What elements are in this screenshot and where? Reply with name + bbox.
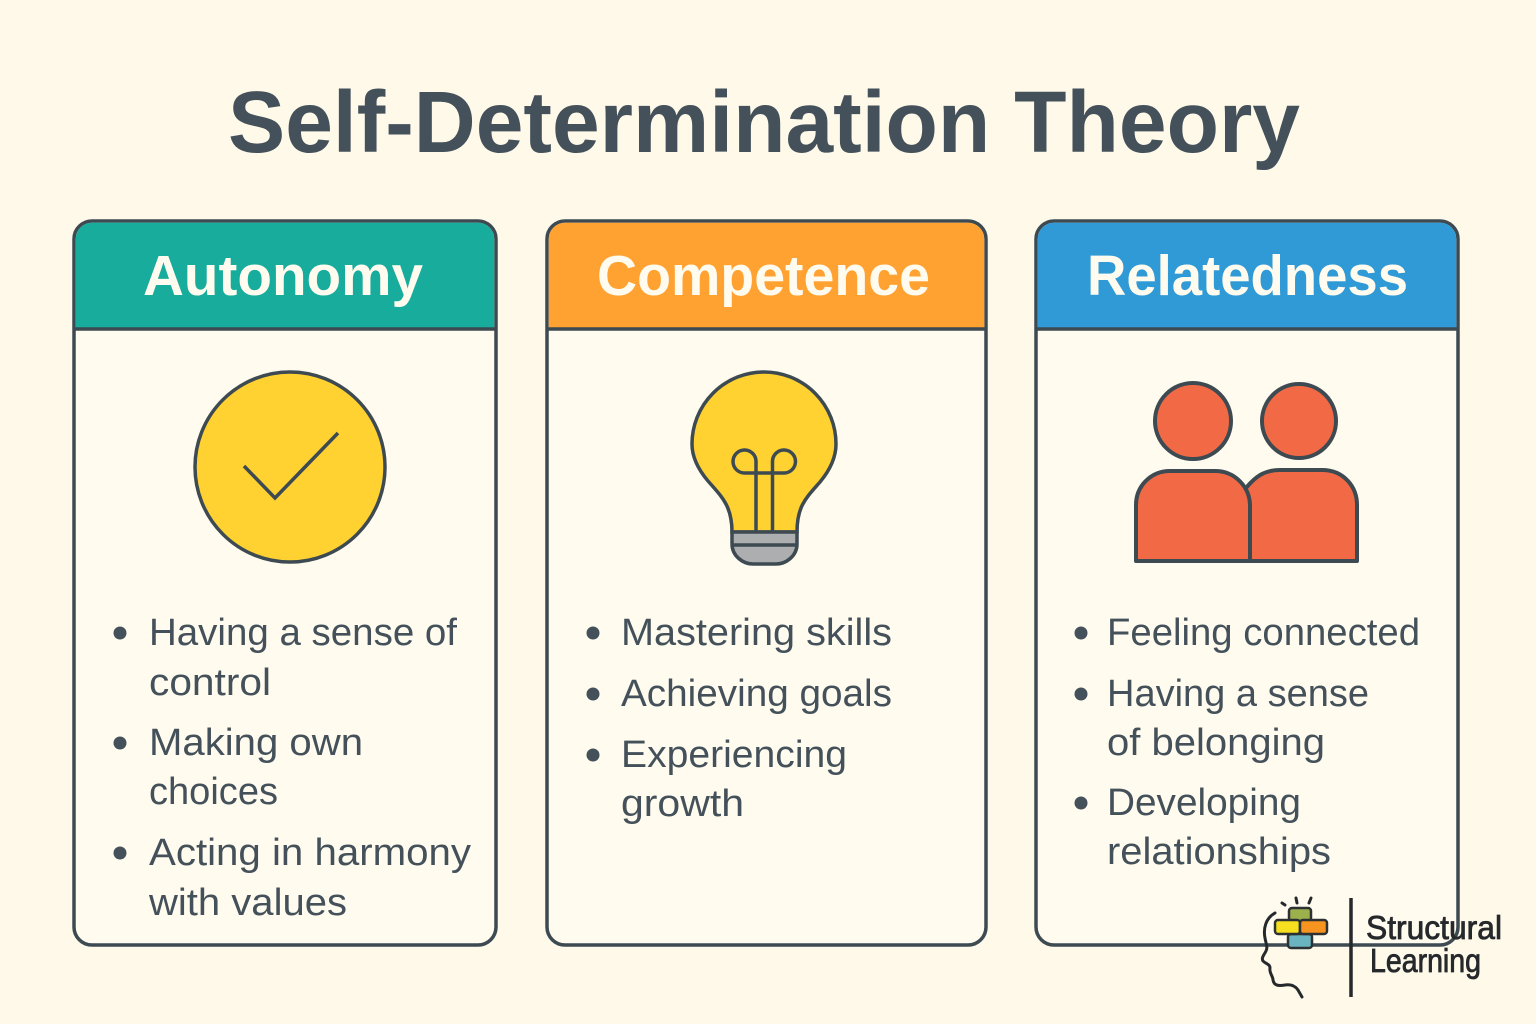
logo: Structural Learning <box>1262 898 1502 997</box>
header: relatedness <box>1036 223 1458 329</box>
bullet list: relatedness: Feeling connected <box>1107 612 1420 654</box>
logo text: Learning <box>1370 942 1481 979</box>
header: competence: Competence <box>597 244 930 308</box>
icon: head with blocks <box>1262 898 1327 997</box>
header: autonomy <box>74 223 496 329</box>
panel: relatedness <box>1036 221 1458 945</box>
panel: autonomy <box>74 221 496 945</box>
bullet list: autonomy: Acting in harmony <box>149 832 471 874</box>
header: relatedness: Relatedness <box>1087 244 1408 308</box>
bullet list: autonomy: choices <box>149 771 278 813</box>
bullet list: autonomy: with values <box>148 882 347 924</box>
header: autonomy: Autonomy <box>143 244 423 308</box>
bullet list: autonomy: Making own <box>149 722 363 764</box>
logo text: Structural <box>1366 909 1502 946</box>
bullet list: autonomy: control <box>149 662 271 704</box>
bullet list: relatedness: Having a sense <box>1107 673 1369 715</box>
bullet list: autonomy <box>114 612 471 924</box>
bullet list: competence: growth <box>621 783 744 825</box>
panel: competence <box>547 221 986 945</box>
icon: check mark circle <box>195 372 385 562</box>
logo text <box>1366 909 1502 979</box>
bullet list: relatedness <box>1074 612 1420 873</box>
icon: light bulb <box>692 372 836 564</box>
bullet list: relatedness: Developing <box>1107 782 1301 824</box>
bullet list: competence: Mastering skills <box>621 612 892 654</box>
title: Self-Determination Theory <box>228 74 1300 171</box>
bullet list: competence: Achieving goals <box>621 673 892 715</box>
bullet list: relatedness: relationships <box>1107 831 1331 873</box>
icon: two people <box>1136 383 1357 561</box>
bullet list: competence <box>586 612 892 825</box>
bullet list: relatedness: of belonging <box>1107 722 1325 764</box>
bullet list: autonomy: Having a sense of <box>149 612 457 654</box>
header: competence <box>547 223 986 329</box>
bullet list: competence: Experiencing <box>621 734 847 776</box>
